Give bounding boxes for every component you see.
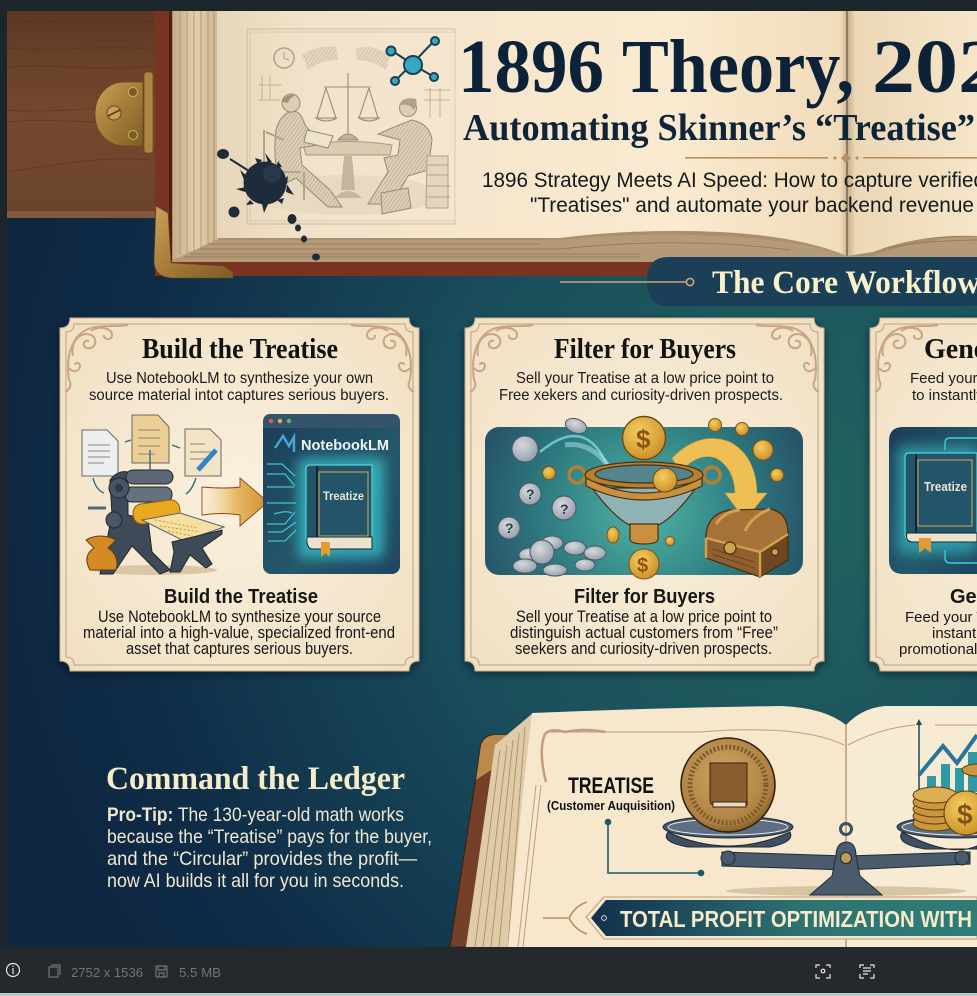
icon: big gold coin <box>622 416 666 460</box>
illustration: Treatize book in loop: Treatize <box>924 480 967 494</box>
panel: Build the Treatise card <box>60 318 419 671</box>
funnel illustration panel: ? <box>526 486 535 502</box>
heading: Command the Ledger: Command the Ledger <box>106 761 405 797</box>
funnel illustration panel: ? <box>560 501 569 517</box>
lower caption: asset that captures serious buyers. <box>126 640 353 658</box>
panel: Build the Treatise card: source material intot captures serious buyers. <box>89 387 389 404</box>
viewer status bar <box>0 947 977 996</box>
icon: printing press <box>88 470 224 575</box>
lower caption <box>510 585 778 658</box>
pro-tip text block: Pro-Tip: The 130-year-old math works <box>107 804 404 826</box>
pro-tip text block <box>107 804 432 892</box>
lower caption: Build the Treatise <box>164 585 318 608</box>
label: Treatise customer acquisition: TREATISE <box>568 773 654 798</box>
icon: gold coin stack <box>913 764 977 835</box>
icon: file size <box>156 966 167 977</box>
lower caption: material into a high-value, specialized front-end <box>83 624 395 642</box>
ledger book <box>450 706 977 947</box>
lower caption: Sell your Treatise at a low price point to <box>516 608 772 626</box>
icon: glowing arc <box>540 436 612 478</box>
image dimensions: 2752 x 1536 <box>71 965 143 980</box>
icon: treatise coin <box>681 738 775 832</box>
title <box>458 25 977 109</box>
title: 1896 <box>458 25 604 109</box>
title: Theory, <box>622 25 854 109</box>
chart: rising bars and trend line <box>916 719 977 792</box>
funnel illustration panel: ? <box>505 520 514 536</box>
panel: Build the Treatise card: Build the Treatise <box>142 334 338 365</box>
tagline <box>482 168 977 217</box>
tagline: "Treatises" and automate your backend revenue <box>530 193 974 217</box>
icon: info <box>6 964 20 976</box>
panel: NotebookLM window: NotebookLM <box>301 438 389 454</box>
ornamental divider <box>685 153 977 163</box>
table <box>303 142 392 155</box>
lower caption: Use NotebookLM to synthesize your source <box>98 608 381 626</box>
lower caption <box>83 585 395 658</box>
lower caption: Filter for Buyers <box>574 585 715 608</box>
icon: silver coins <box>498 416 606 576</box>
pro-tip text block: now AI builds it all for you in seconds. <box>107 870 404 892</box>
man right <box>368 120 432 204</box>
wooden panel with brass hinge <box>7 11 155 218</box>
lower caption: distinguish actual customers from “Free” <box>510 624 778 642</box>
pro-tip text block: because the “Treatise” pays for the buyer, <box>107 826 432 848</box>
icon: NotebookLM logo <box>275 436 294 452</box>
balance scale <box>316 73 379 140</box>
panel: Build the Treatise card: Use NotebookLM to synthesize your own <box>106 370 373 387</box>
stacked books and case <box>426 156 448 208</box>
funnel illustration panel: $ <box>636 424 651 454</box>
icon: ink splatter <box>217 149 320 260</box>
icon: strainer funnel <box>569 462 720 544</box>
man left <box>275 111 342 207</box>
connector line <box>605 819 704 876</box>
section banner: The Core Workflow <box>560 257 977 306</box>
icon: Treatize book: Treatize <box>323 489 364 503</box>
engraving: two men negotiating at table with scales <box>247 29 455 224</box>
panel: Filter for Buyers card: Filter for Buyers <box>554 334 736 365</box>
banner: total profit optimization <box>543 897 977 939</box>
icon: molecule network <box>386 37 439 85</box>
icon: gold arrow into chest <box>672 438 767 520</box>
icon: dimensions <box>49 965 60 977</box>
icon: golden arrow <box>202 478 268 526</box>
lower caption: seekers and curiosity-driven prospects. <box>515 640 772 658</box>
panel: Generate card (cropped) <box>870 318 977 671</box>
panel: Filter for Buyers card: Sell your Treatise at a low price point to <box>516 370 774 387</box>
file size: 5.5 MB <box>179 965 221 980</box>
icon: capture <box>816 965 830 978</box>
panel: Filter for Buyers card <box>465 318 824 671</box>
balance scale <box>663 816 977 896</box>
icon: source documents <box>82 415 221 494</box>
lower caption <box>899 586 977 658</box>
illustration: Treatize book in loop <box>889 427 977 574</box>
label: Treatise customer acquisition: (Customer Auquisition) <box>547 798 675 813</box>
funnel illustration panel <box>485 416 803 579</box>
icon: ink jar <box>86 536 117 570</box>
icon: falling coins <box>542 418 784 579</box>
label: Treatise customer acquisition <box>547 773 675 813</box>
icon: brass hinge <box>95 72 153 153</box>
icon: treasure chest <box>706 509 788 577</box>
gold corner <box>154 206 233 278</box>
pro-tip text block: and the “Circular” provides the profit— <box>107 848 417 870</box>
icon: gold coin stack: $ <box>957 799 973 830</box>
panel: Filter for Buyers card: Free xekers and curiosity-driven prospects. <box>499 387 783 404</box>
panel: NotebookLM window <box>263 414 400 574</box>
open book header <box>154 11 977 278</box>
lower caption: promotional <box>899 641 977 658</box>
icon: Treatize book <box>298 458 384 558</box>
funnel illustration panel: $ <box>637 555 648 577</box>
icon: text scan <box>860 965 874 978</box>
